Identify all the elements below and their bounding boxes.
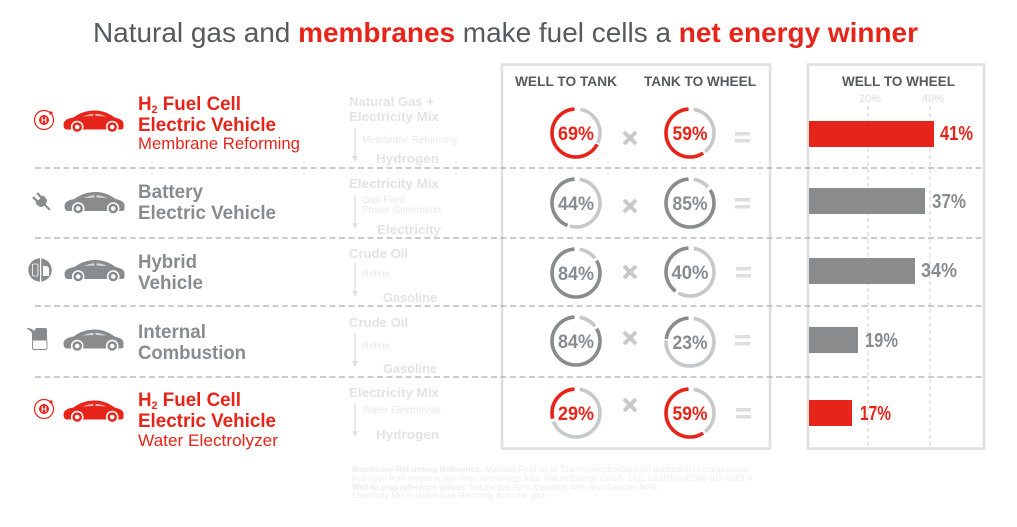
column headings: WELL TO WHEEL xyxy=(842,74,955,89)
vehicle label: Battery xyxy=(138,182,203,203)
icon: hybrid pump xyxy=(28,258,52,282)
footnote references: hydrogen from methane with near-zero energy loss, Nature Energy (2017). DOI: 10.1038/s41560-017-0029-4 xyxy=(352,474,753,483)
energy pathway xyxy=(349,176,442,237)
equals sign xyxy=(736,408,751,418)
well to tank ring 84% xyxy=(552,317,600,365)
bar 37%: 37% xyxy=(932,191,966,213)
bar chart axis: 20% xyxy=(859,93,881,105)
multiply sign xyxy=(624,399,636,411)
well to tank ring 29%: 29% xyxy=(558,404,594,425)
footnote references xyxy=(352,465,753,500)
energy pathway: Electricity Mix xyxy=(349,109,440,124)
bar 37% xyxy=(809,188,966,214)
energy pathway: Refine xyxy=(362,341,390,352)
vehicle label: Membrane Reforming xyxy=(138,135,300,153)
vehicle label xyxy=(138,252,203,294)
well to tank ring 69%: 69% xyxy=(558,124,594,145)
tank to wheel ring 23%: 23% xyxy=(672,333,708,354)
well to tank ring 84%: 84% xyxy=(558,332,594,353)
vehicle label: Fuel Cell xyxy=(158,94,241,115)
tank to wheel ring 85%: 85% xyxy=(672,194,708,215)
bar 34% xyxy=(809,258,957,284)
icon: grey car xyxy=(64,330,124,352)
row: H2 fuel cell membrane reforming xyxy=(34,94,973,166)
vehicle label: Fuel Cell xyxy=(158,390,241,411)
energy pathway: Water Electrolysis xyxy=(362,405,441,416)
vehicle label: 2 xyxy=(152,400,158,412)
tank to wheel ring 40%: 40% xyxy=(672,263,709,284)
multiply sign xyxy=(624,332,636,344)
energy pathway: Natural Gas + xyxy=(349,94,434,109)
energy pathway xyxy=(349,94,457,166)
row: H2 fuel cell water electrolyzer xyxy=(34,385,891,450)
vehicle label: Electric Vehicle xyxy=(138,411,276,432)
icon: red car xyxy=(64,400,124,423)
column headings xyxy=(515,74,955,89)
well to tank ring 84%: 84% xyxy=(558,264,594,285)
footnote references: Electricity Mix is defined as electricity from the grid. xyxy=(352,491,547,500)
equals sign xyxy=(736,267,751,278)
icon: fuel can xyxy=(27,328,47,350)
energy pathway: Gasoline xyxy=(383,290,437,305)
well to tank ring 29% xyxy=(552,389,600,437)
bar 17% xyxy=(809,400,891,426)
footnote references: Well to plug reference values: Natural gas 92%, Electricity 48% and Gasoline 84%. xyxy=(352,483,658,492)
tank to wheel ring 59% xyxy=(666,109,714,157)
icon: hydrogen atom: H xyxy=(41,405,47,414)
energy pathway: Membrane Reforming xyxy=(362,135,457,146)
energy pathway: Hydrogen xyxy=(376,151,439,166)
icon: grey car xyxy=(64,260,124,283)
well to tank ring 84% xyxy=(552,249,600,297)
bar 41%: 41% xyxy=(940,123,973,145)
vehicle label: 2 xyxy=(152,104,158,116)
energy pathway: Electricity xyxy=(377,222,442,237)
vehicle label: Water Electrolyzer xyxy=(138,432,279,450)
bar chart axis xyxy=(859,93,944,448)
multiply sign xyxy=(624,266,636,278)
panel: well to tank and tank to wheel xyxy=(502,64,770,448)
tank to wheel ring 40% xyxy=(666,248,714,296)
equals sign xyxy=(735,335,750,346)
energy pathway: Power Generation xyxy=(362,205,441,216)
icon: hydrogen atom: H xyxy=(41,116,47,125)
tank to wheel ring 23% xyxy=(666,318,714,366)
energy pathway: Electricity Mix xyxy=(349,385,440,400)
energy pathway xyxy=(349,246,437,305)
tank to wheel ring 59%: 59% xyxy=(672,124,708,145)
vehicle label: Hybrid xyxy=(138,252,197,273)
multiply sign xyxy=(624,132,636,144)
row: internal combustion xyxy=(27,315,898,376)
tank to wheel ring 59%: 59% xyxy=(672,404,708,425)
vehicle label: Electric Vehicle xyxy=(138,203,276,224)
well to tank ring 44%: 44% xyxy=(558,194,594,215)
icon: hydrogen atom xyxy=(34,110,54,130)
bar 34%: 34% xyxy=(921,260,957,282)
energy pathway xyxy=(349,315,437,376)
energy pathway xyxy=(349,385,441,442)
energy pathway: Hydrogen xyxy=(376,427,439,442)
vehicle label: Combustion xyxy=(138,343,246,364)
column headings: TANK TO WHEEL xyxy=(644,74,756,89)
vehicle label: H xyxy=(138,94,152,115)
panel: well to wheel xyxy=(808,64,984,448)
well to tank ring 44% xyxy=(552,179,600,227)
equals sign xyxy=(735,132,750,142)
bar 19%: 19% xyxy=(865,330,898,352)
bar 17%: 17% xyxy=(860,403,891,425)
icon: plug xyxy=(31,191,54,214)
title: Natural gas and membranes make fuel cells a net energy winner xyxy=(93,17,918,48)
bar 19% xyxy=(809,327,898,353)
well to tank ring 69% xyxy=(552,109,600,157)
bar chart axis: 40% xyxy=(922,93,944,105)
row: hybrid vehicle xyxy=(28,246,957,305)
vehicle label: H xyxy=(138,390,152,411)
vehicle label xyxy=(138,182,276,224)
icon: hydrogen atom xyxy=(34,400,54,418)
energy pathway: Electricity Mix xyxy=(349,176,440,191)
energy pathway: Crude Oil xyxy=(349,315,408,330)
vehicle label: Vehicle xyxy=(138,273,203,294)
energy pathway: Gasoline xyxy=(383,361,437,376)
vehicle label xyxy=(138,390,279,450)
vehicle label: Internal xyxy=(138,322,206,343)
vehicle label: Electric Vehicle xyxy=(138,115,276,136)
column headings: WELL TO TANK xyxy=(515,74,617,89)
icon: grey car xyxy=(64,192,124,215)
energy pathway: Crude Oil xyxy=(349,246,408,261)
energy pathway: Gas-Fired xyxy=(362,195,405,206)
equals sign xyxy=(735,198,750,208)
bar 41% xyxy=(809,121,973,147)
energy pathway: Refine xyxy=(362,269,390,280)
footnote references: Membrane Reforming Reference: Malerød-Fjeld, et al. Thermo-electrochemical production of compressed xyxy=(352,465,748,474)
vehicle label xyxy=(138,322,246,364)
tank to wheel ring 59% xyxy=(666,389,714,437)
row: battery electric vehicle xyxy=(31,176,966,237)
vehicle label xyxy=(138,94,300,153)
icon: red car xyxy=(64,110,124,133)
tank to wheel ring 85% xyxy=(666,179,714,227)
multiply sign xyxy=(624,200,636,212)
